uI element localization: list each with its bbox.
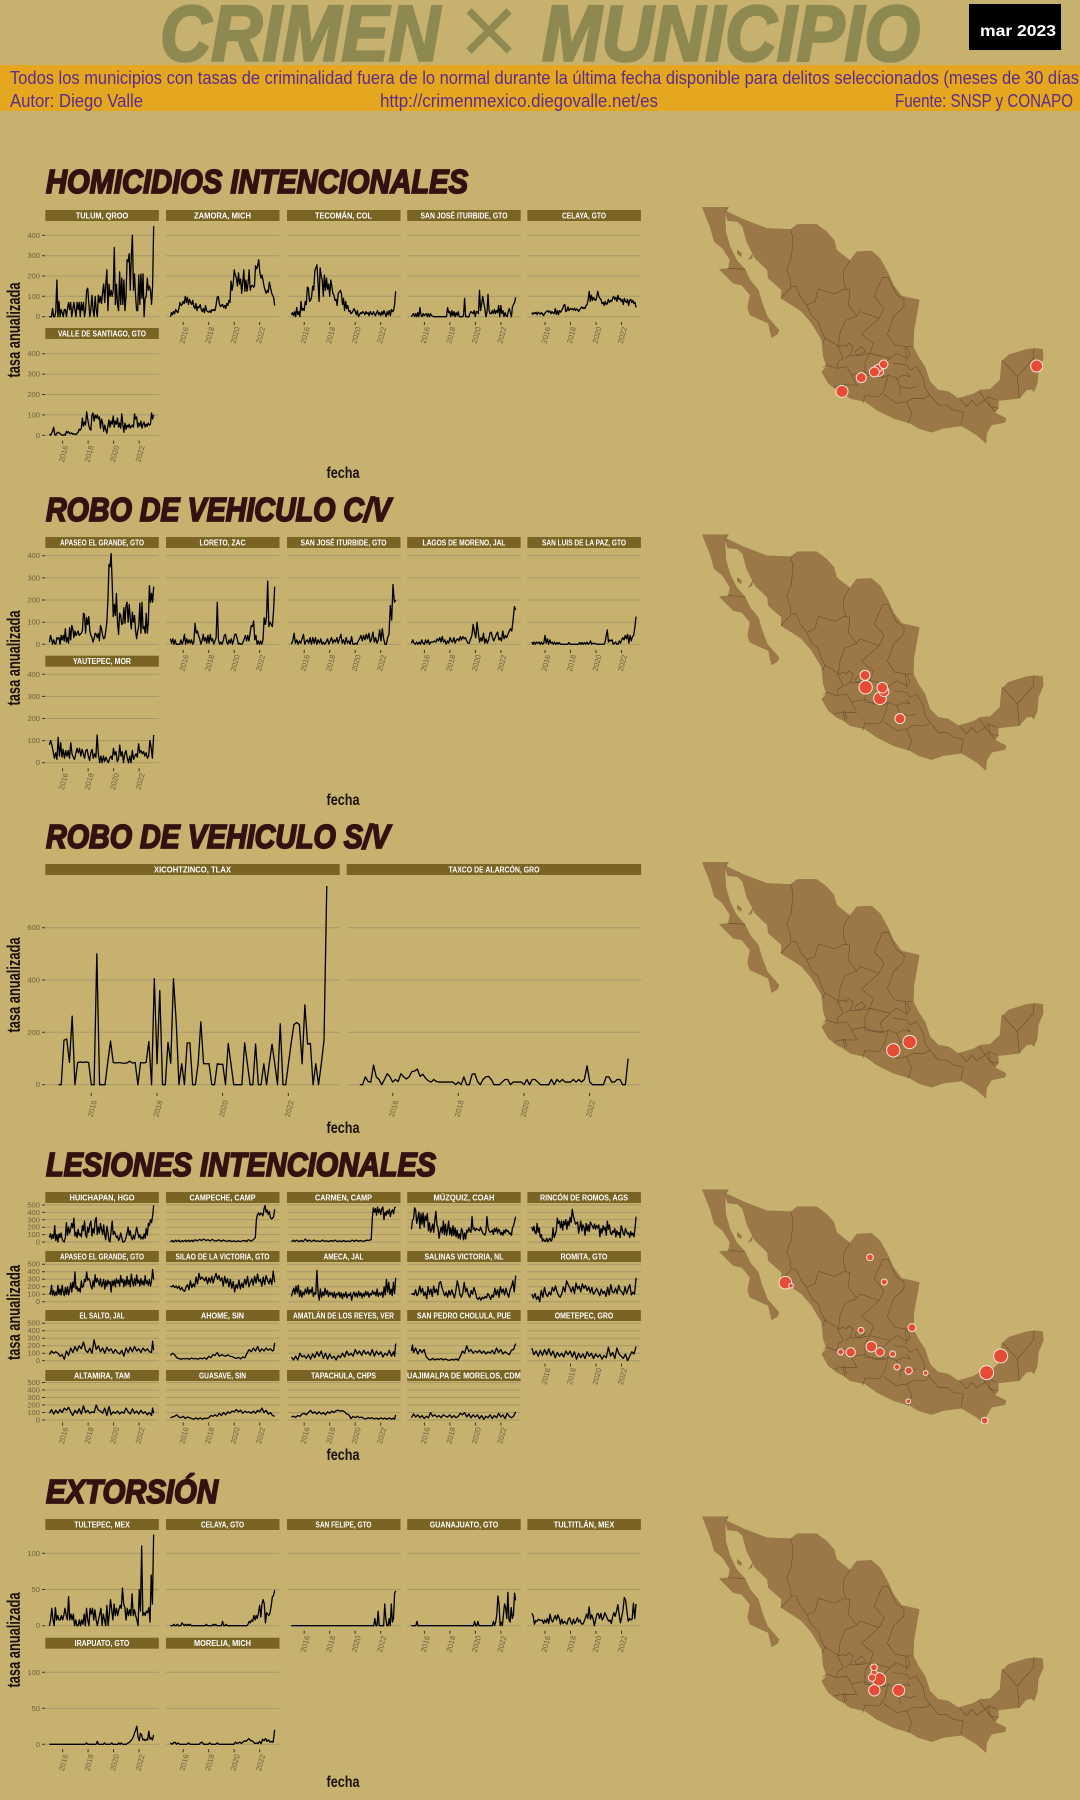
- panel: Valle de Santiago: 200: [27, 390, 40, 399]
- panel: Tecoman: [287, 210, 400, 345]
- panel: Lagos de Moreno: 2016: [419, 654, 432, 672]
- panel: Tapachula: 2018: [324, 1426, 337, 1445]
- panel: San Jose Iturbide robo: SAN JOSÉ ITURBIDE, GTO: [300, 538, 386, 548]
- panel: Morelia: 2022: [254, 1753, 267, 1772]
- panel: Zamora: 2022: [254, 326, 267, 345]
- panel: Xicohtzinco: [27, 864, 340, 1118]
- panel: Romita: [527, 1251, 641, 1302]
- panel: Irapuato: 0: [36, 1740, 40, 1749]
- map: homicidios: [702, 207, 1043, 443]
- panel: San Felipe: 2022: [375, 1635, 388, 1653]
- panel: Cuajimalpa: 2022: [495, 1426, 508, 1445]
- panel: Huichapan: 100: [27, 1230, 40, 1239]
- panel: Yautepec: 0: [36, 758, 40, 767]
- panel: Xicohtzinco: 200: [27, 1028, 40, 1037]
- map: lesiones: [702, 1190, 1043, 1426]
- panel: Silao: [166, 1251, 280, 1302]
- y axis title: homicidios: tasa anualizada: [4, 282, 24, 378]
- panel: Tecoman: 2018: [324, 326, 337, 345]
- panel: Celaya: 2016: [539, 326, 553, 345]
- panel: Taxco: 2016: [387, 1099, 400, 1118]
- panel: Lagos de Moreno: 2020: [470, 654, 483, 672]
- panel: Guasave: 2018: [203, 1426, 216, 1445]
- x axis title: robo s/v: fecha: [326, 1120, 360, 1137]
- panel: San Jose Iturbide: SAN JOSÉ ITURBIDE, GTO: [420, 212, 508, 220]
- panel: Altamira: 2020: [108, 1426, 121, 1445]
- panel: Valle de Santiago: 0: [36, 431, 40, 440]
- panel: Tultitlan: [527, 1519, 641, 1653]
- panel: Loreto: LORETO, ZAC: [200, 538, 246, 548]
- panel: Altamira: ALTAMIRA, TAM: [74, 1372, 130, 1380]
- panel: Ometepec: OMETEPEC, GRO: [555, 1312, 613, 1320]
- heading: extorsion: EXTORSIÓN: [46, 1473, 219, 1510]
- panel: Yautepec: 400: [27, 670, 40, 679]
- panel: Carmen: CARMEN, CAMP: [315, 1194, 373, 1202]
- panel: Tulum: 300: [27, 251, 40, 260]
- panel: San Jose Iturbide: 2020: [470, 326, 483, 345]
- panel: San Jose Iturbide robo: 2020: [350, 654, 363, 672]
- heading: robo c/v: ROBO DE VEHICULO C/V: [46, 491, 394, 528]
- panel: Tulum: 100: [27, 292, 40, 301]
- panel: Valle de Santiago: 100: [27, 410, 40, 419]
- panel: Xicohtzinco: 0: [36, 1080, 40, 1089]
- panel: Celaya extorsion: CELAYA, GTO: [201, 1520, 244, 1530]
- panel: Irapuato: 50: [32, 1704, 40, 1713]
- panel: El Salto: 300: [27, 1334, 40, 1343]
- map: extorsion: [702, 1517, 1043, 1753]
- panel: El Salto: 0: [36, 1356, 40, 1365]
- panel: Loreto: [166, 537, 280, 672]
- panel: Celaya: [527, 210, 641, 345]
- panel: Cuajimalpa: 2016: [419, 1426, 432, 1445]
- panel: Muzquiz: MÚZQUIZ, COAH: [434, 1194, 495, 1202]
- panel: Ameca: AMECA, JAL: [324, 1252, 364, 1262]
- heading: lesiones: LESIONES INTENCIONALES: [46, 1146, 436, 1183]
- panel: Yautepec: 2022: [134, 772, 147, 791]
- panel: Rincon de Romos: RINCÓN DE ROMOS, AGS: [540, 1194, 629, 1202]
- panel: Tultitlan: 2018: [565, 1635, 578, 1653]
- panel: San Felipe: 2018: [324, 1635, 337, 1653]
- panel: Silao: SILAO DE LA VICTORIA, GTO: [176, 1252, 270, 1262]
- panel: San Luis de la Paz: 2018: [565, 654, 578, 672]
- panel: San Jose Iturbide: [407, 210, 521, 345]
- panel: San Felipe: 2020: [350, 1635, 363, 1653]
- panel: Zamora: ZAMORA, MICH: [194, 212, 251, 220]
- panel: San Felipe: 2016: [299, 1635, 312, 1653]
- panel: Huichapan: HUICHAPAN, HGO: [70, 1194, 134, 1202]
- panel: Huichapan: 300: [27, 1215, 40, 1224]
- panel: Rincon de Romos: [527, 1192, 641, 1242]
- panel: Amatlan: AMATLÁN DE LOS REYES, VER: [293, 1312, 394, 1320]
- panel: Valle de Santiago: VALLE DE SANTIAGO, GTO: [58, 330, 146, 338]
- panel: Altamira: 300: [27, 1393, 40, 1402]
- panel: Apaseo lesiones: 500: [27, 1260, 40, 1269]
- subtitle band: http://crimenmexico.diegovalle.net/es: [380, 91, 658, 111]
- panel: Yautepec: 2018: [83, 772, 96, 791]
- panel: Zamora: 2020: [229, 326, 242, 345]
- panel: Tecoman: 2016: [299, 326, 312, 345]
- panel: Ometepec: 2016: [539, 1367, 553, 1386]
- panel: Muzquiz: [407, 1192, 521, 1242]
- panel: Altamira: 400: [27, 1386, 40, 1394]
- panel: Yautepec: 2016: [57, 772, 70, 791]
- panel: Guanajuato: 2022: [495, 1635, 508, 1653]
- panel: San Jose Iturbide robo: 2018: [324, 654, 337, 672]
- panel: Celaya: 2018: [565, 326, 578, 345]
- subtitle band: Autor: Diego Valle: [10, 91, 143, 111]
- panel: Apaseo el Grande: 100: [27, 618, 40, 627]
- panel: Irapuato: 2016: [57, 1753, 70, 1772]
- panel: Altamira: 200: [27, 1400, 40, 1410]
- panel: Altamira: [27, 1370, 159, 1445]
- panel: Xicohtzinco: 2020: [217, 1099, 230, 1118]
- panel: Zamora: 2018: [203, 326, 216, 345]
- panel: Celaya extorsion: [166, 1519, 280, 1626]
- panel: Loreto: 2022: [254, 654, 267, 672]
- panel: Valle de Santiago: 300: [27, 370, 40, 379]
- panel: Irapuato: 2020: [108, 1753, 121, 1772]
- panel: Tecoman: TECOMÁN, COL: [315, 212, 372, 220]
- panel: Irapuato: IRAPUATO, GTO: [75, 1639, 129, 1648]
- panel: Apaseo lesiones: 100: [27, 1290, 40, 1299]
- panel: El Salto: 200: [27, 1341, 40, 1350]
- panel: Guasave: 2016: [178, 1426, 191, 1445]
- panel: El Salto: 500: [27, 1319, 40, 1328]
- panel: Apaseo el Grande: 300: [27, 573, 40, 582]
- panel: Salinas Victoria: [407, 1251, 521, 1302]
- panel: Tultitlan: TULTITLÁN, MEX: [554, 1520, 615, 1530]
- panel: El Salto: EL SALTO, JAL: [80, 1312, 125, 1320]
- panel: Tulum: [27, 210, 159, 321]
- panel: Guasave: [166, 1370, 280, 1445]
- panel: Tecoman: 2022: [375, 326, 388, 345]
- x axis title: lesiones: fecha: [326, 1447, 360, 1464]
- panel: San Luis de la Paz: 2022: [616, 654, 629, 672]
- panel: Carmen: [287, 1192, 400, 1242]
- panel: Zamora: [166, 210, 280, 345]
- panel: Apaseo lesiones: APASEO EL GRANDE, GTO: [60, 1252, 144, 1262]
- panel: Yautepec: 200: [27, 714, 40, 723]
- panel: Tapachula: 2016: [299, 1426, 312, 1445]
- panel: Guasave: 2022: [254, 1426, 267, 1445]
- panel: Yautepec: 2020: [108, 772, 121, 791]
- panel: Cuajimalpa: [402, 1370, 526, 1445]
- panel: Tulum: 400: [27, 231, 40, 240]
- panel: Valle de Santiago: 2016: [57, 444, 70, 463]
- panel: Ometepec: 2020: [590, 1367, 604, 1386]
- panel: San Luis de la Paz: [527, 537, 641, 672]
- panel: Tulum: 0: [36, 312, 40, 321]
- panel: Tecoman: 2020: [350, 326, 363, 345]
- panel: Guanajuato: [407, 1519, 521, 1653]
- panel: Huichapan: 0: [36, 1238, 40, 1246]
- panel: Ahome: [166, 1310, 280, 1361]
- panel: Campeche: [166, 1192, 280, 1242]
- panel: Morelia: 2018: [203, 1753, 216, 1772]
- panel: Tultepec: 100: [27, 1549, 40, 1558]
- panel: El Salto: 100: [27, 1349, 40, 1358]
- panel: Xicohtzinco: 2016: [86, 1099, 99, 1118]
- panel: Xicohtzinco: 600: [27, 923, 40, 932]
- panel: Lagos de Moreno: 2022: [495, 654, 508, 672]
- panel: Valle de Santiago: 2022: [134, 444, 147, 463]
- panel: Taxco: [347, 864, 641, 1118]
- panel: Altamira: 2018: [83, 1426, 96, 1445]
- panel: San Jose Iturbide: 2018: [444, 326, 457, 345]
- panel: Loreto: 2016: [178, 654, 191, 672]
- panel: Apaseo el Grande: 0: [36, 640, 40, 649]
- y axis title: robo c/v: tasa anualizada: [4, 610, 24, 706]
- panel: Valle de Santiago: 400: [27, 349, 40, 358]
- panel: Xicohtzinco: 400: [27, 976, 40, 984]
- panel: Tultitlan: 2016: [539, 1635, 553, 1653]
- x axis title: robo c/v: fecha: [326, 792, 360, 809]
- panel: Lagos de Moreno: LAGOS DE MORENO, JAL: [422, 538, 506, 548]
- panel: Tulum: TULUM, QROO: [76, 212, 128, 220]
- panel: Morelia: 2020: [229, 1753, 242, 1772]
- panel: Tapachula: [287, 1370, 400, 1445]
- panel: Huichapan: 200: [27, 1223, 40, 1232]
- panel: Guasave: 2020: [229, 1426, 242, 1445]
- panel: Zamora: 2016: [178, 326, 191, 345]
- panel: Morelia: [166, 1638, 280, 1772]
- panel: Guanajuato: GUANAJUATO, GTO: [430, 1520, 498, 1530]
- panel: Huichapan: 500: [27, 1200, 40, 1210]
- panel: Ameca: [287, 1251, 400, 1302]
- panel: Apaseo lesiones: 400: [27, 1267, 40, 1276]
- panel: San Luis de la Paz: 2020: [590, 654, 604, 672]
- panel: San Jose Iturbide robo: 2022: [375, 654, 388, 672]
- panel: Apaseo el Grande: 400: [27, 551, 40, 560]
- panel: Taxco: 2020: [518, 1099, 532, 1118]
- panel: Apaseo lesiones: 300: [27, 1275, 40, 1284]
- panel: Valle de Santiago: 2020: [108, 444, 121, 463]
- panel: Celaya: 2022: [616, 326, 629, 345]
- panel: Xicohtzinco: XICOHTZINCO, TLAX: [154, 866, 232, 874]
- panel: San Jose Iturbide: 2022: [495, 326, 508, 345]
- panel: Yautepec: 100: [27, 736, 40, 745]
- panel: Cuajimalpa: CUAJIMALPA DE MORELOS, CDMX: [402, 1372, 526, 1380]
- panel: Tultitlan: 2022: [616, 1635, 629, 1653]
- panel: Yautepec: 300: [27, 692, 40, 701]
- panel: Taxco: 2018: [453, 1099, 466, 1118]
- heading: robo s/v: ROBO DE VEHICULO S/V: [46, 818, 393, 855]
- title: [160, 0, 920, 87]
- panel: Salinas Victoria: SALINAS VICTORIA, NL: [424, 1252, 504, 1262]
- panel: Xicohtzinco: 2018: [151, 1099, 165, 1118]
- panel: Guanajuato: 2018: [444, 1635, 457, 1653]
- panel: San Jose Iturbide robo: [287, 537, 400, 672]
- panel: San Jose Iturbide: 2016: [419, 326, 432, 345]
- panel: Morelia: 2016: [178, 1753, 191, 1772]
- panel: Apaseo lesiones: [27, 1251, 159, 1306]
- panel: Loreto: 2018: [203, 654, 216, 672]
- panel: Tultepec: [27, 1519, 159, 1630]
- panel: Tulum: 200: [27, 272, 40, 280]
- panel: Ometepec: 2022: [616, 1367, 629, 1386]
- panel: Romita: ROMITA, GTO: [560, 1252, 608, 1262]
- panel: Huichapan: [27, 1192, 159, 1246]
- panel: Altamira: 2016: [57, 1426, 70, 1445]
- map: robo c/v: [702, 535, 1043, 771]
- panel: Taxco: TAXCO DE ALARCÓN, GRO: [448, 866, 540, 874]
- panel: Tapachula: 2020: [350, 1426, 363, 1445]
- panel: Guanajuato: 2016: [419, 1635, 432, 1653]
- panel: San Jose Iturbide robo: 2016: [299, 654, 312, 672]
- panel: Celaya: 2020: [590, 326, 604, 345]
- x axis title: extorsion: fecha: [326, 1774, 360, 1791]
- y axis title: robo s/v: tasa anualizada: [4, 937, 24, 1032]
- panel: Irapuato: 100: [27, 1668, 40, 1677]
- panel: Apaseo el Grande: [27, 537, 159, 649]
- map: robo s/v: [702, 862, 1043, 1098]
- panel: San Pedro Cholula: SAN PEDRO CHOLULA, PUE: [417, 1312, 512, 1320]
- panel: Yautepec: [27, 656, 159, 791]
- panel: Amatlan: [287, 1310, 400, 1361]
- panel: Valle de Santiago: [27, 328, 159, 463]
- panel: Tultitlan: 2020: [590, 1635, 604, 1653]
- panel: Guanajuato: 2020: [470, 1635, 483, 1653]
- panel: Valle de Santiago: 2018: [83, 444, 96, 463]
- panel: El Salto: 400: [27, 1326, 40, 1335]
- panel: Apaseo el Grande: APASEO EL GRANDE, GTO: [60, 538, 144, 548]
- subtitle band: [0, 65, 1080, 111]
- panel: Tultepec: 0: [36, 1621, 40, 1630]
- panel: El Salto: [27, 1310, 159, 1365]
- panel: Cuajimalpa: 2018: [444, 1426, 457, 1445]
- panel: Cuajimalpa: 2020: [470, 1426, 483, 1445]
- panel: Apaseo lesiones: 0: [36, 1297, 40, 1306]
- panel: Apaseo lesiones: 200: [27, 1282, 40, 1291]
- panel: Ometepec: 2018: [565, 1367, 578, 1386]
- panel: Tultepec: TULTEPEC, MEX: [74, 1520, 130, 1530]
- panel: Guasave: GUASAVE, SIN: [199, 1372, 246, 1380]
- panel: Altamira: 500: [27, 1378, 40, 1387]
- panel: Irapuato: 2018: [83, 1753, 96, 1772]
- panel: San Pedro Cholula: [407, 1310, 521, 1361]
- panel: Altamira: 2022: [134, 1426, 147, 1445]
- panel: Xicohtzinco: 2022: [283, 1099, 296, 1118]
- y axis title: lesiones: tasa anualizada: [4, 1264, 24, 1360]
- panel: Morelia: MORELIA, MICH: [194, 1639, 251, 1648]
- panel: San Felipe: [287, 1519, 400, 1653]
- panel: Altamira: 0: [36, 1416, 40, 1424]
- panel: Ahome: AHOME, SIN: [201, 1312, 244, 1320]
- panel: San Luis de la Paz: SAN LUIS DE LA PAZ, GTO: [542, 538, 626, 548]
- panel: Ometepec: [527, 1310, 641, 1386]
- panel: Loreto: 2020: [229, 654, 242, 672]
- panel: Lagos de Moreno: 2018: [444, 654, 457, 672]
- panel: Lagos de Moreno: [407, 537, 521, 672]
- panel: San Luis de la Paz: 2016: [539, 654, 553, 672]
- panel: Celaya: CELAYA, GTO: [562, 212, 606, 220]
- panel: Tultepec: 50: [32, 1585, 40, 1594]
- panel: Apaseo el Grande: 200: [27, 596, 40, 604]
- panel: Tapachula: 2022: [375, 1426, 388, 1445]
- y axis title: extorsion: tasa anualizada: [4, 1592, 24, 1688]
- panel: Campeche: CAMPECHE, CAMP: [190, 1194, 256, 1202]
- panel: Yautepec: YAUTEPEC, MOR: [73, 657, 131, 666]
- date badge: mar 2023: [980, 23, 1056, 40]
- panel: Huichapan: 400: [27, 1208, 40, 1217]
- heading: homicidios: HOMICIDIOS INTENCIONALES: [46, 163, 468, 200]
- date badge: [969, 4, 1061, 50]
- panel: Irapuato: 2022: [134, 1753, 147, 1772]
- panel: Tapachula: TAPACHULA, CHPS: [311, 1372, 377, 1380]
- panel: Taxco: 2022: [584, 1099, 597, 1118]
- x axis title: homicidios: fecha: [326, 465, 360, 482]
- panel: Altamira: 100: [27, 1408, 40, 1417]
- panel: San Felipe: SAN FELIPE, GTO: [316, 1520, 372, 1530]
- panel: Irapuato: [27, 1638, 159, 1772]
